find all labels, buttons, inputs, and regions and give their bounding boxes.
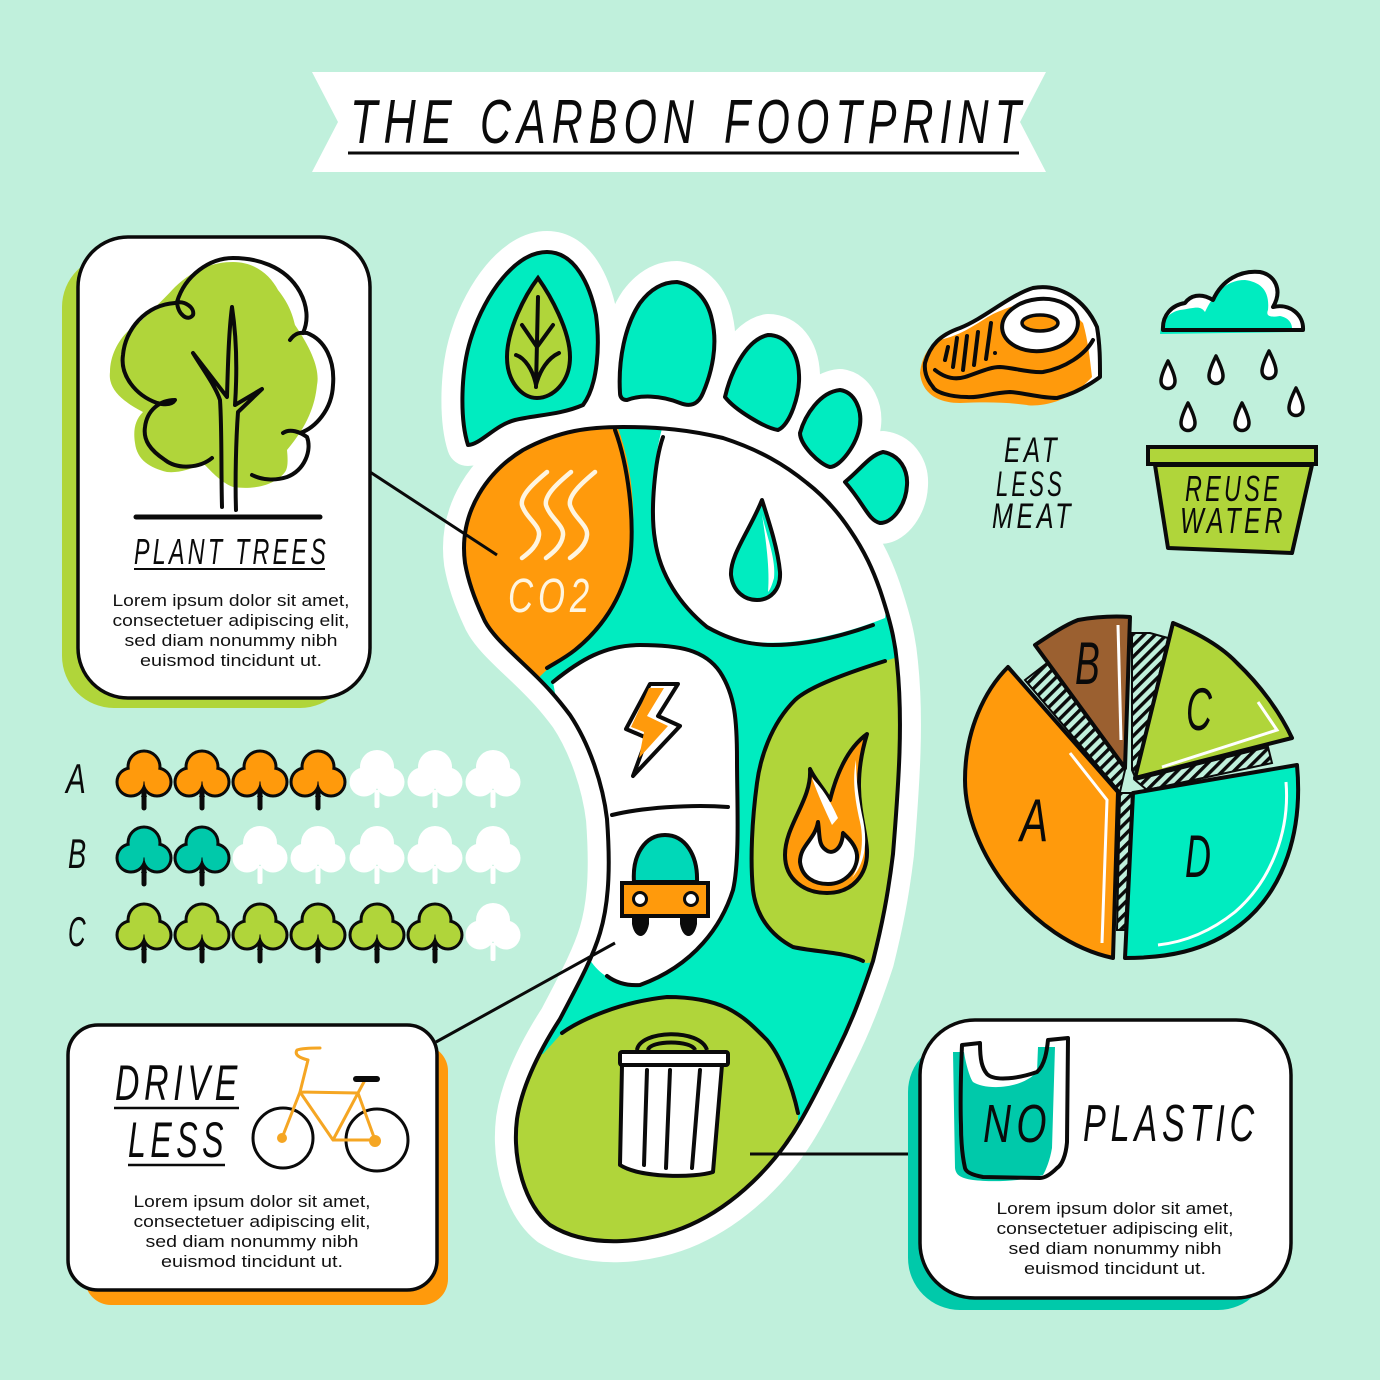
heading: drive less — [114, 1055, 242, 1168]
slice B — [1035, 617, 1130, 768]
icon: bag — [953, 1038, 1068, 1181]
icon: trash bin — [620, 1034, 728, 1176]
body text: no plastic — [996, 1199, 1234, 1278]
text: eat less meat: MEAT — [992, 497, 1074, 536]
heading: drive less: LESS — [128, 1112, 228, 1168]
slice D — [1125, 765, 1298, 958]
body text: plant trees: consectetuer adipiscing elit, — [112, 611, 350, 630]
text: reuse water: REUSE — [1185, 468, 1282, 509]
row B: B — [68, 830, 90, 877]
icon: bucket: WATER — [1180, 500, 1286, 541]
body text: plant trees: Lorem ipsum dolor sit amet, — [112, 591, 350, 610]
pie chart — [965, 617, 1298, 958]
body text: drive less: euismod tincidunt ut. — [161, 1252, 343, 1271]
text: eat less meat — [992, 431, 1074, 536]
body text: plant trees — [112, 591, 350, 670]
footprint — [440, 252, 920, 1260]
connector: drive less — [436, 943, 615, 1042]
title text — [350, 88, 1027, 157]
row B — [68, 826, 520, 884]
region: flame — [754, 658, 898, 963]
body text: plant trees: euismod tincidunt ut. — [140, 651, 322, 670]
body text: no plastic: Lorem ipsum dolor sit amet, — [996, 1199, 1234, 1218]
icon: flame — [785, 734, 867, 893]
region: CO2 — [466, 429, 634, 677]
slice B: B — [1075, 630, 1105, 697]
heading: plant trees: PLANT TREES — [134, 531, 329, 572]
foot white halo — [462, 252, 907, 1241]
region: energy and car — [553, 645, 738, 985]
row C: C — [68, 908, 89, 955]
icon: bicycle — [253, 1048, 408, 1171]
body text: no plastic: sed diam nonummy nibh — [1008, 1239, 1222, 1258]
panel: plant trees — [62, 237, 370, 708]
hatched wedges — [1025, 633, 1272, 930]
icon: meat steak — [920, 287, 1100, 405]
region: bin — [518, 999, 798, 1240]
row C — [68, 903, 520, 961]
text: eat less meat: EAT — [1004, 431, 1060, 470]
body text: drive less — [134, 1192, 370, 1271]
heading: drive less: DRIVE — [115, 1055, 242, 1111]
title text: THE — [350, 88, 458, 157]
icon: tree — [110, 258, 333, 517]
slice C — [1135, 623, 1292, 778]
connector: no plastic — [750, 1152, 922, 1156]
heading: plastic: PLASTIC — [1083, 1095, 1259, 1153]
toes — [620, 282, 907, 523]
connector: plant trees — [370, 472, 497, 555]
slice D: D — [1185, 823, 1216, 890]
icon: bag: NO — [983, 1094, 1052, 1154]
title text: FOOTPRINT — [724, 88, 1027, 157]
foot sole — [462, 425, 902, 1244]
icon: rain drops — [1161, 351, 1303, 430]
icon: car — [622, 835, 708, 936]
big toe with leaf — [462, 252, 598, 445]
body text: plant trees: sed diam nonummy nibh — [124, 631, 338, 650]
row A — [64, 750, 521, 808]
title text: CARBON — [480, 88, 700, 157]
pictogram rows — [64, 750, 521, 961]
icon: CO2 heat waves — [508, 472, 595, 623]
body text: drive less: consectetuer adipiscing elit, — [134, 1212, 370, 1231]
icon: CO2 heat waves: CO2 — [508, 570, 594, 623]
panel: drive less — [68, 1025, 448, 1305]
panel: no plastic — [908, 1020, 1291, 1310]
icon: rain cloud — [1160, 272, 1303, 334]
slice A: A — [1018, 787, 1054, 854]
title banner — [312, 72, 1046, 172]
text: eat less meat: LESS — [996, 465, 1065, 504]
body text: drive less: Lorem ipsum dolor sit amet, — [134, 1192, 370, 1211]
slice A — [965, 667, 1118, 958]
icon: bucket — [1148, 447, 1316, 553]
body text: drive less: sed diam nonummy nibh — [146, 1232, 358, 1251]
icon: water drop — [731, 500, 780, 600]
slice C: C — [1186, 676, 1217, 743]
region: water — [654, 430, 886, 643]
icon: lightning — [626, 684, 680, 776]
body text: no plastic: consectetuer adipiscing elit, — [996, 1219, 1234, 1238]
body text: no plastic: euismod tincidunt ut. — [1024, 1259, 1206, 1278]
row A: A — [64, 755, 90, 802]
